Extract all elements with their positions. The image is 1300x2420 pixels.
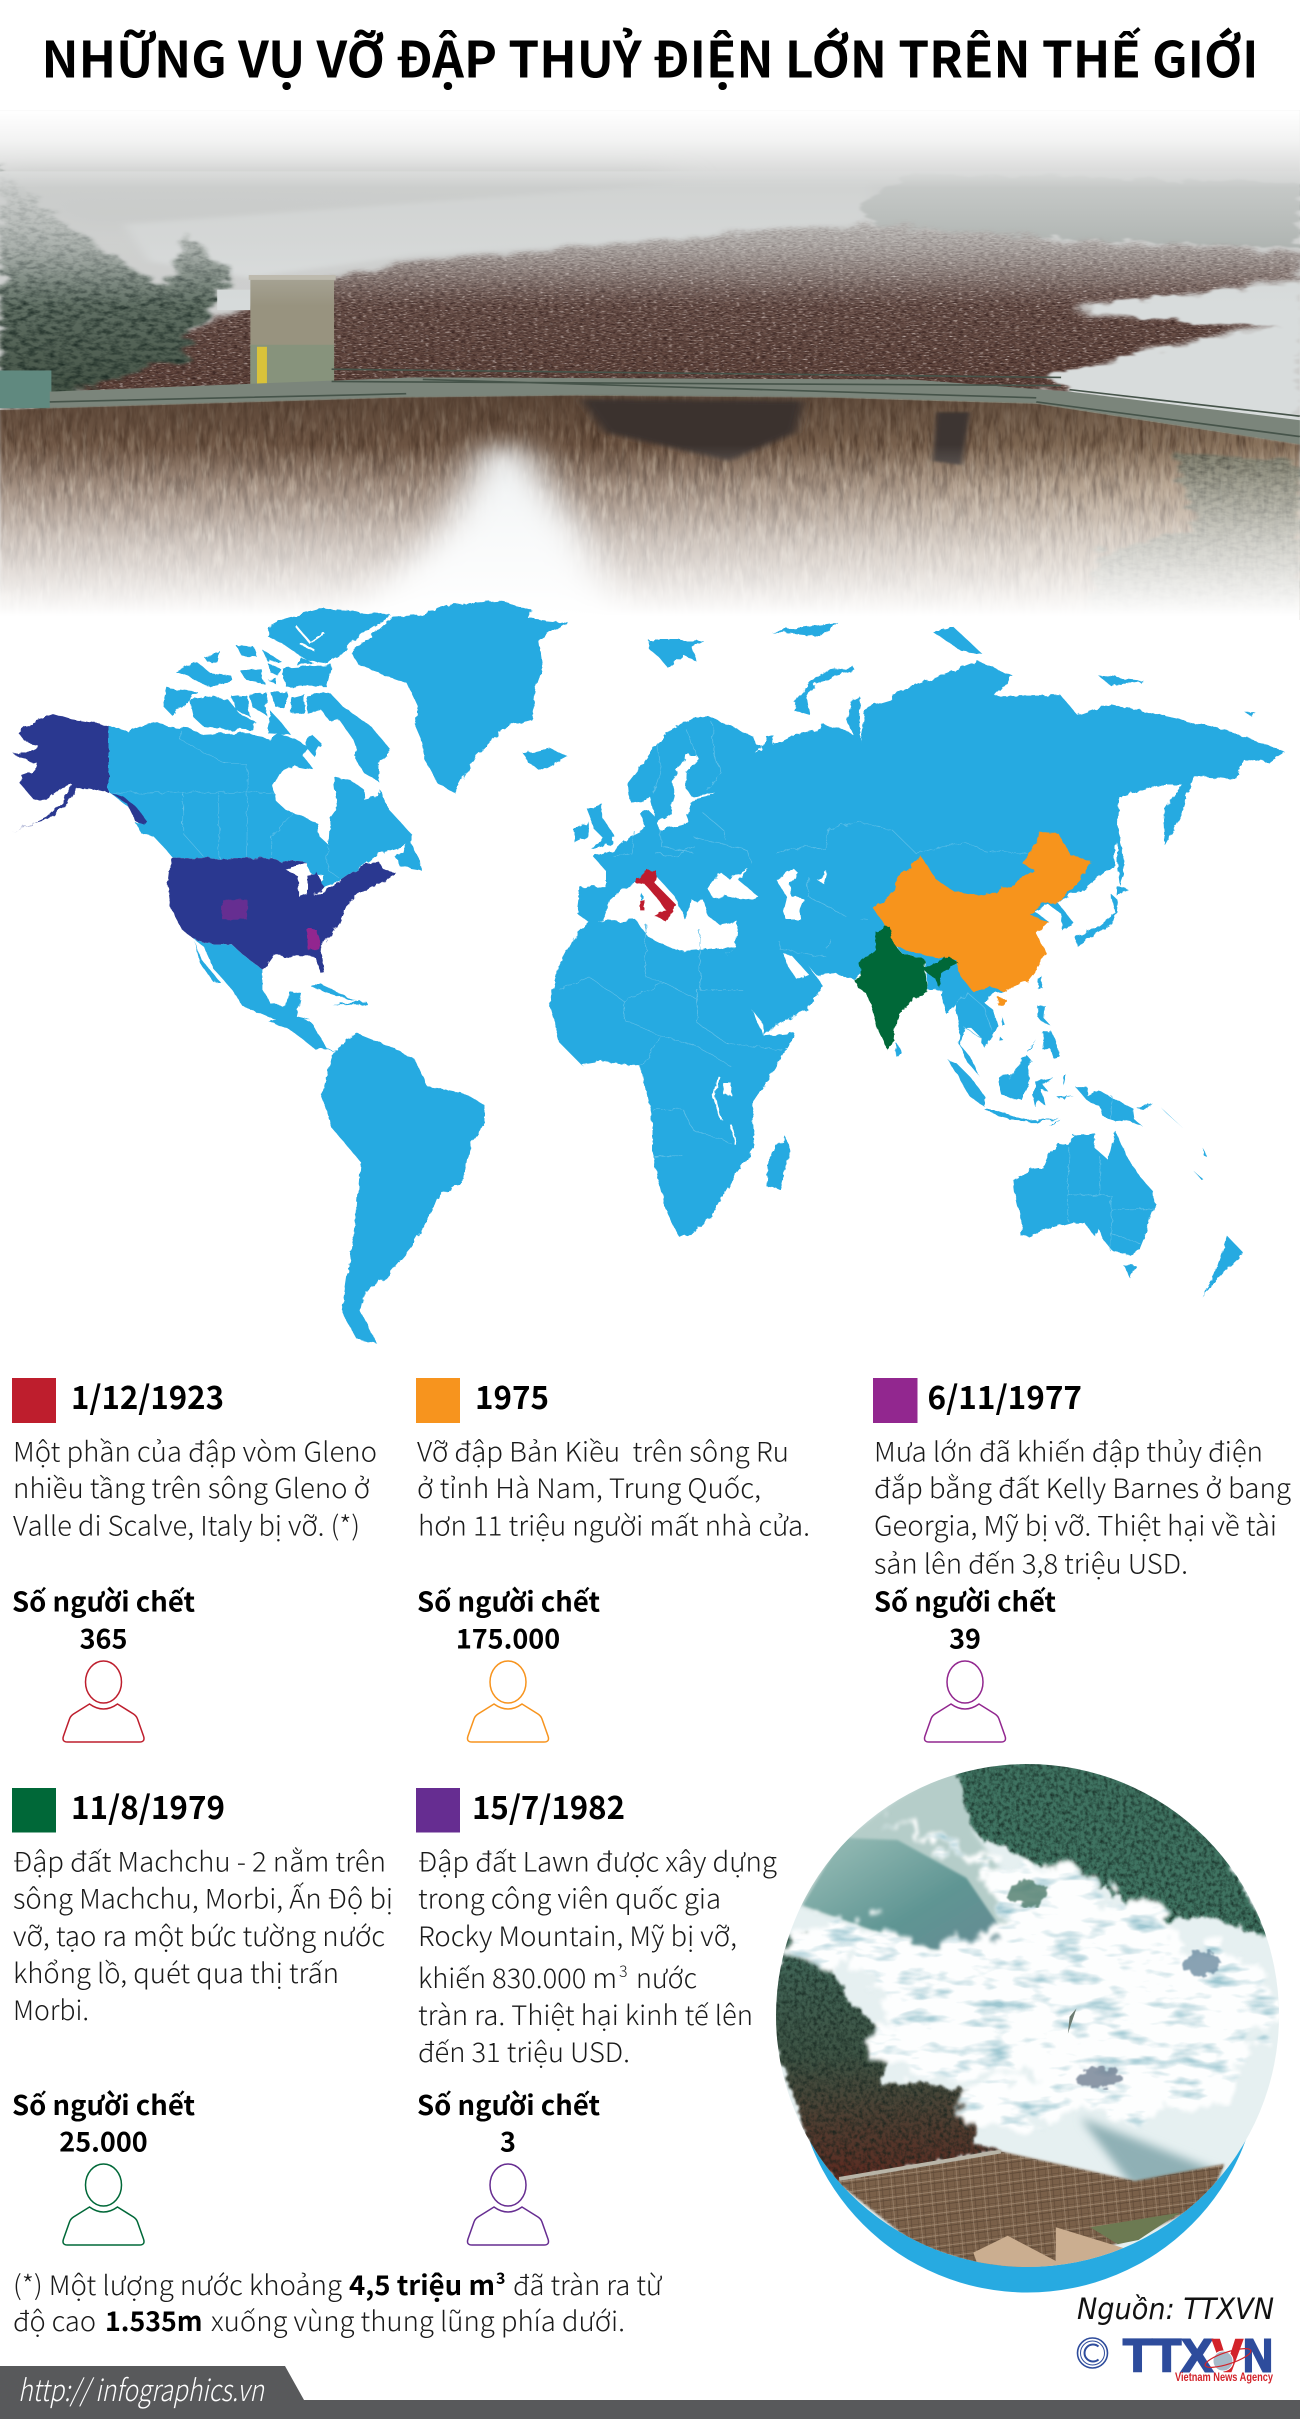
- date heading: 11/8/1979: [71, 1783, 225, 1829]
- hero photo: flooded dam with debris: [0, 110, 1300, 644]
- footnote: 3: [496, 2265, 505, 2289]
- panel: event 1975 China: [416, 1373, 810, 1742]
- description: ở tỉnh Hà Nam, Trung Quốc,: [417, 1467, 761, 1506]
- panel: event 1977 Georgia USA: [873, 1373, 1291, 1742]
- footnote: 4,5 triệu m: [349, 2264, 495, 2303]
- footnote: xuống vùng thung lũng phía dưới.: [211, 2300, 625, 2339]
- footer url: http:// infographics.vn: [18, 2366, 265, 2410]
- footnote: (*) Một lượng nước khoảng: [13, 2264, 342, 2303]
- description: Vỡ đập Bản Kiều trên sông Ru: [417, 1430, 789, 1470]
- map: Italy: [635, 870, 676, 921]
- death toll number: 39: [949, 1618, 981, 1656]
- map: China: [873, 833, 1091, 1006]
- icon: TTXVN logo: V: [1212, 2330, 1243, 2382]
- date heading: 1975: [475, 1373, 549, 1419]
- icon: TTXVN logo: N: [1243, 2330, 1273, 2382]
- death toll number: 175.000: [456, 1618, 560, 1656]
- description: vỡ, tạo ra một bức tường nước: [13, 1915, 385, 1954]
- death toll label: Số người chết: [12, 1580, 195, 1620]
- description: đến 31 triệu USD.: [418, 2031, 630, 2070]
- death toll label: Số người chết: [12, 2084, 195, 2123]
- death toll label: Số người chết: [874, 1580, 1056, 1620]
- icon: person: [468, 1661, 548, 1742]
- description: sông Machchu, Morbi, Ấn Độ bị: [13, 1878, 393, 1916]
- death toll number: 3: [500, 2120, 516, 2160]
- description: [417, 1430, 810, 1544]
- description: Đập đất Machchu - 2 nằm trên: [13, 1840, 386, 1880]
- description: [418, 1840, 777, 2070]
- death toll label: Số người chết: [417, 1580, 600, 1620]
- legend swatch red: [12, 1378, 56, 1423]
- legend swatch orange: [416, 1378, 460, 1423]
- description: hơn 11 triệu người mất nhà cửa.: [418, 1504, 810, 1544]
- description: khiến 830.000 m: [418, 1957, 617, 1996]
- date heading: 6/11/1977: [928, 1373, 1082, 1419]
- footnote: đã tràn ra từ: [513, 2264, 662, 2303]
- death toll number: 365: [80, 1618, 127, 1656]
- circular photo of dam breach: [760, 1760, 1299, 2292]
- source credit: Nguồn: TTXVN: [1077, 2292, 1274, 2326]
- icon: TTXVN logo: [1078, 2330, 1273, 2384]
- date heading: 15/7/1982: [472, 1783, 625, 1829]
- description: Mưa lớn đã khiến đập thủy điện: [874, 1430, 1263, 1470]
- description: nhiều tầng trên sông Gleno ở: [13, 1467, 370, 1506]
- date heading: 1/12/1923: [71, 1373, 224, 1419]
- description: nước: [636, 1957, 697, 1996]
- description: trong công viên quốc gia: [418, 1878, 721, 1916]
- map: South America, Russia and New Zealand: [269, 622, 1285, 1344]
- map: USA and Alaska: [12, 714, 396, 975]
- map: Middle East, Africa, South Asia: [549, 787, 1128, 1236]
- description: Morbi.: [13, 1989, 89, 2028]
- description: sản lên đến 3,8 triệu USD.: [874, 1542, 1188, 1582]
- description: tràn ra. Thiệt hại kinh tế lên: [418, 1994, 753, 2033]
- description: [13, 1430, 377, 1544]
- footnote: 1.535m: [105, 2300, 202, 2339]
- map: India: [854, 927, 959, 1050]
- legend swatch green: [12, 1788, 56, 1832]
- legend swatch magenta: [873, 1378, 918, 1423]
- description: [874, 1430, 1291, 1582]
- logo wordmark: TTX: [1123, 2330, 1213, 2382]
- description: Georgia, Mỹ bị vỡ. Thiệt hại về tài: [874, 1504, 1277, 1544]
- title: NHỮNG VỤ VỠ ĐẬP THUỶ ĐIỆN LỚN TRÊN THẾ GIỚI: [42, 20, 1258, 92]
- icon: person: [924, 1661, 1006, 1742]
- map: Colorado highlight: [222, 900, 247, 920]
- icon: copyright mark: [1078, 2338, 1108, 2368]
- footnote: [13, 2264, 662, 2339]
- description: Đập đất Lawn được xây dựng: [418, 1840, 777, 1880]
- map: Georgia highlight: [306, 929, 321, 950]
- map: highlighted countries: [635, 833, 1091, 1050]
- description: khổng lồ, quét qua thị trấn: [13, 1952, 339, 1991]
- panel: event 1979 India: [12, 1783, 393, 2245]
- footer bar: [0, 2366, 1300, 2419]
- panel: event 1923 Italy: [12, 1373, 377, 1742]
- map: South-East Asia and Australia: [940, 963, 1207, 1255]
- description: Rocky Mountain, Mỹ bị vỡ,: [418, 1915, 737, 1954]
- panel: event 1982 Colorado USA: [416, 1783, 777, 2245]
- footnote: độ cao: [13, 2300, 96, 2339]
- death toll label: Số người chết: [417, 2084, 600, 2123]
- circular photo: [776, 1764, 1279, 2267]
- death toll number: 25.000: [59, 2120, 148, 2160]
- icon: person: [63, 2164, 144, 2245]
- world map: [12, 601, 1285, 1344]
- globe mark: [1213, 2351, 1233, 2371]
- description: Valle di Scalve, Italy bị vỡ. (*): [13, 1504, 360, 1544]
- legend swatch violet: [416, 1788, 460, 1832]
- description: đắp bằng đất Kelly Barnes ở bang: [874, 1467, 1291, 1506]
- description: 3: [619, 1958, 628, 1982]
- map: Europe and Scandinavia: [575, 640, 860, 940]
- map: North America: [12, 601, 568, 1020]
- logo tagline: Vietnam News Agency: [1175, 2370, 1273, 2384]
- description: Một phần của đập vòm Gleno: [13, 1430, 377, 1470]
- icon: person: [63, 1661, 144, 1742]
- description: [13, 1840, 393, 2028]
- icon: person: [468, 2164, 548, 2245]
- blue crescent: [795, 1828, 1260, 2292]
